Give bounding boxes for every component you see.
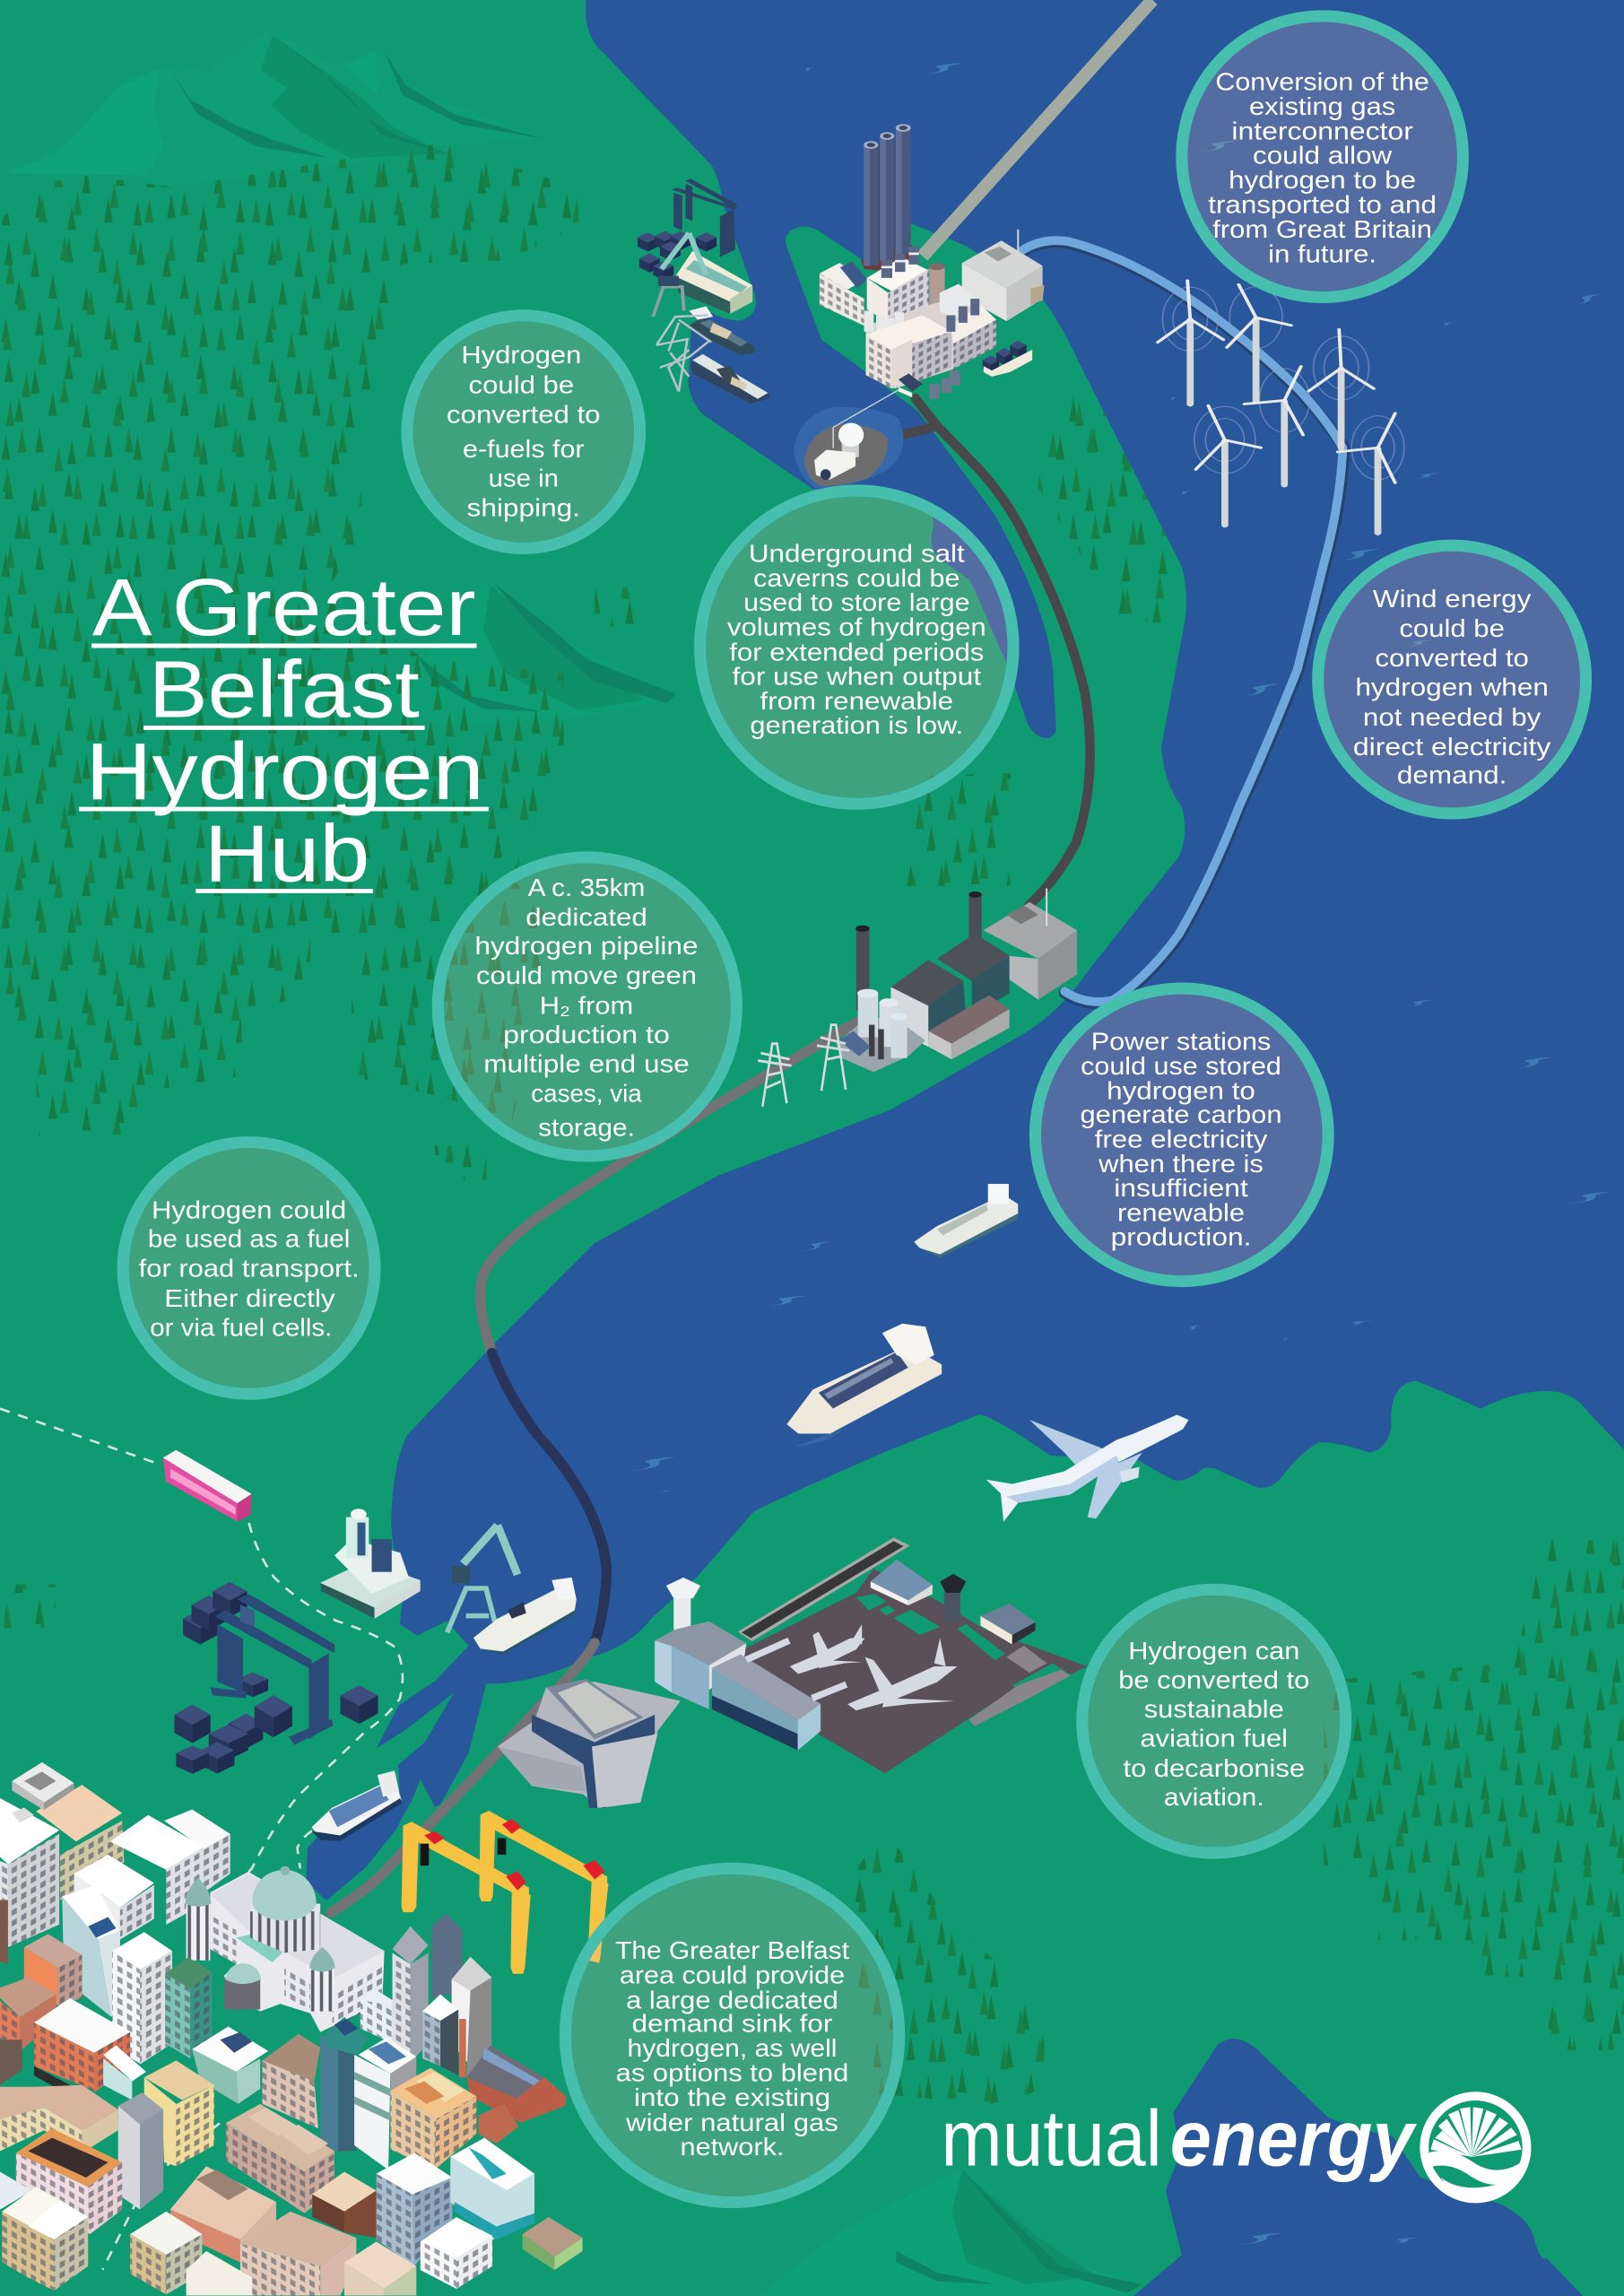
capitol: Belfast City Hall [186, 1866, 385, 2032]
icon: container ship in estuary [312, 1770, 402, 1841]
callout text: into the existing [634, 2083, 830, 2111]
pipeline: north section [867, 398, 1090, 905]
callout text: area could provide [620, 1961, 845, 1989]
pipeline: south section [331, 1643, 595, 1912]
callout text: generation is low. [750, 711, 963, 739]
callout text: insufficient [1114, 1174, 1248, 1202]
icon: road bus [163, 1450, 252, 1521]
callout text: Hydrogen could [152, 1196, 346, 1223]
callout text: could be [469, 371, 574, 399]
callout text: transported to and [1208, 191, 1437, 219]
callout: road transport [123, 1142, 375, 1394]
callout: dedicated pipeline [438, 857, 736, 1156]
tall tank [929, 263, 945, 307]
callout text [475, 874, 699, 1142]
callout ring [700, 491, 1013, 804]
icon: hydrogen production complex [794, 124, 1045, 489]
callout text: Either directly [164, 1284, 335, 1312]
callout text: shipping. [467, 493, 580, 521]
callout text: direct electricity [1353, 733, 1550, 761]
logo: mutual energy [941, 2094, 1527, 2201]
grass cut-outs [856, 1594, 1005, 1660]
icon: Harland and Wolff cranes [402, 1811, 608, 1974]
callout text: generate carbon [1081, 1100, 1282, 1128]
skyscrapers [360, 1913, 491, 2077]
callout ring [1182, 16, 1463, 297]
callout text: as options to blend [616, 2059, 848, 2087]
callout text: The Greater Belfast [615, 1936, 849, 1964]
control tower [940, 1574, 966, 1622]
title line 4: Hub [204, 810, 369, 900]
apron [741, 1569, 1088, 1773]
gantry crane [672, 178, 738, 257]
callout text: multiple end use [483, 1050, 690, 1078]
tanker ship 2 [690, 354, 769, 404]
containers [638, 231, 716, 280]
service area [968, 1670, 1070, 1726]
callout text: renewable [1117, 1198, 1245, 1226]
callout text: sustainable [1144, 1695, 1284, 1723]
turbine towers [1190, 319, 1378, 533]
callout text: network. [681, 2133, 784, 2161]
callout text: could move green [476, 961, 697, 989]
orange block [390, 2068, 476, 2170]
small units [899, 341, 1032, 399]
gantry crane [211, 1594, 334, 1744]
silos [864, 284, 977, 339]
grey building [984, 888, 1077, 1000]
logo emblem [1424, 2096, 1527, 2201]
title underlines [79, 644, 489, 893]
icon: Titanic Belfast building [498, 1679, 681, 1808]
turbine noise arcs [1162, 287, 1404, 480]
callout text: dedicated [525, 903, 647, 931]
callout text: H₂ from [540, 991, 633, 1019]
callout ring [123, 1142, 375, 1394]
church [466, 2046, 567, 2144]
callout ring [407, 316, 640, 548]
callout text: hydrogen to be [1229, 166, 1416, 194]
process plant base [836, 1015, 925, 1072]
title line 2: Belfast [149, 645, 420, 735]
filler between blocks [866, 296, 996, 388]
main hall [655, 1622, 746, 1709]
callout text: to decarbonise [1124, 1754, 1305, 1782]
callout text: when there is [1098, 1150, 1264, 1178]
water ripples [620, 63, 1611, 2245]
mid buildings [0, 1932, 320, 2128]
tanker ship 1 [689, 307, 755, 355]
icon: power station [758, 888, 1077, 1107]
turbine blades [1158, 281, 1395, 483]
callout text: used to store large [743, 588, 970, 616]
callout ring [1082, 1589, 1346, 1853]
low building [928, 996, 1010, 1059]
callout text: Power stations [1091, 1028, 1271, 1056]
crane details [424, 1819, 605, 1891]
callout text: aviation. [1164, 1783, 1264, 1811]
title line 1: A Greater [92, 563, 476, 653]
glass wing [712, 1655, 821, 1751]
callout text: from renewable [760, 687, 953, 715]
balcony block [354, 2038, 416, 2170]
callout text: hydrogen, as well [627, 2034, 838, 2062]
callout text: storage. [538, 1114, 635, 1142]
hangar [871, 1560, 933, 1605]
grey block [962, 230, 1045, 321]
callout text: converted to [1375, 644, 1529, 672]
cylinder tower [320, 2017, 369, 2151]
hydrogen storage cavern [794, 390, 903, 489]
callout: gas interconnector conversion [1182, 16, 1463, 297]
dashed road [0, 1409, 403, 2270]
callout text: hydrogen to [1107, 1076, 1255, 1104]
chimneys [861, 124, 913, 271]
tanks [838, 989, 907, 1059]
callout: wind energy conversion [1318, 545, 1586, 813]
central block [867, 247, 929, 324]
callout text: existing gas [1249, 92, 1395, 120]
callout text: caverns could be [753, 564, 960, 592]
lower terrace [0, 2060, 334, 2234]
dock building [675, 251, 752, 314]
icon: container ship [786, 1324, 942, 1447]
callout text: hydrogen pipeline [475, 932, 699, 960]
callout text: could be [1399, 614, 1505, 642]
callout text [139, 1196, 360, 1342]
turbine halls [890, 934, 1010, 1047]
callout ring [1036, 988, 1328, 1282]
callout: salt cavern storage [700, 491, 1013, 804]
callout text: e-fuels for [463, 435, 585, 463]
container stacks [174, 1582, 378, 1774]
icon: harbour office [320, 1509, 421, 1619]
callout text [615, 1936, 849, 2161]
parked aircraft [790, 1624, 958, 1710]
callout text: not needed by [1363, 703, 1541, 731]
callout text: in future. [1268, 239, 1376, 267]
rear crane [479, 1811, 608, 1962]
water: bottom right bay [1133, 2039, 1583, 2296]
title line 3: Hydrogen [86, 727, 484, 817]
crane [653, 233, 707, 317]
mountain: bottom [761, 2170, 1142, 2296]
cable from wind farm [1022, 240, 1344, 1004]
callout text: from Great Britain [1212, 215, 1432, 243]
callout text: be used as a fuel [148, 1225, 350, 1253]
second hangar [980, 1604, 1036, 1644]
icon: tanker ship [914, 1184, 1018, 1257]
icon: quay crane [447, 1526, 517, 1632]
callout text [1353, 585, 1550, 788]
icon: city of Belfast [0, 1762, 583, 2296]
callout text [447, 341, 601, 521]
icon: airport terminal [655, 1578, 847, 1751]
icon: airport [738, 1537, 1088, 1773]
pylons [758, 1025, 849, 1107]
mountain: top left range [4, 32, 544, 187]
logo wordmark: energy [1170, 2094, 1417, 2183]
callout text: wider natural gas [625, 2109, 838, 2136]
callout text: be converted to [1118, 1665, 1309, 1693]
icon: estuary cargo ship [473, 1578, 577, 1655]
callout text: hydrogen when [1355, 674, 1549, 701]
callout text: Hydrogen can [1128, 1637, 1299, 1665]
callout: Greater Belfast demand sink [565, 1868, 899, 2203]
callout text: A c. 35km [528, 874, 645, 901]
callout ring [1318, 545, 1586, 813]
callout text: Hydrogen [461, 341, 581, 369]
runway [738, 1537, 910, 1641]
left block [820, 262, 867, 326]
mountain: middle [384, 583, 676, 725]
callout text: could use stored [1081, 1052, 1281, 1080]
logo wordmark [941, 2094, 1417, 2183]
pipeline: middle section [481, 1022, 856, 1353]
callout text: or via fuel cells. [150, 1314, 332, 1342]
callout text [727, 540, 986, 739]
callout text: production. [1111, 1223, 1251, 1251]
callout text: Underground salt [749, 540, 965, 568]
callout: sustainable aviation fuel [1082, 1589, 1346, 1853]
helipads [1006, 1646, 1046, 1673]
jet bridges [746, 1640, 847, 1698]
pipeline: under water [492, 1353, 606, 1643]
callout text: interconnector [1231, 117, 1413, 144]
callout text: cases, via [531, 1079, 642, 1107]
lattice cranes [656, 316, 711, 391]
logo wordmark: mutual [941, 2094, 1162, 2183]
callout text: for road transport. [139, 1254, 360, 1282]
callout text: Conversion of the [1215, 67, 1429, 95]
callout text [1081, 1028, 1282, 1251]
callout text: for use when output [733, 662, 981, 690]
callout ring [565, 1868, 899, 2203]
chimneys [855, 891, 982, 1010]
hydrogen pipeline [331, 398, 1090, 1912]
callout text: volumes of hydrogen [727, 613, 986, 641]
front crane [402, 1822, 531, 1974]
water: sea and estuary [306, 0, 1624, 1900]
icon: container terminal [174, 1582, 378, 1774]
callout ring [438, 857, 736, 1156]
callout text: converted to [447, 400, 601, 428]
callout text: Wind energy [1373, 585, 1531, 613]
icon: aeroplane [986, 1414, 1188, 1522]
icon: offshore wind farm [1158, 281, 1404, 533]
callout text: free electricity [1095, 1125, 1267, 1152]
front buildings [2, 2138, 583, 2296]
callout: e-fuels for shipping [407, 316, 640, 548]
icon: top port and ships [638, 178, 769, 404]
callout text: aviation fuel [1141, 1725, 1288, 1752]
callout text: for extended periods [729, 638, 984, 665]
right low block [946, 299, 996, 369]
callout text: demand sink for [632, 2010, 832, 2038]
callout text: could allow [1253, 142, 1393, 170]
callout text: demand. [1397, 761, 1507, 788]
callout text: production to [503, 1021, 670, 1048]
lower block [866, 316, 951, 388]
callout text: a large dedicated [626, 1986, 838, 2013]
tower [666, 1578, 700, 1638]
callout text [1208, 67, 1437, 267]
rear buildings [0, 1762, 230, 2017]
callout text: use in [489, 465, 559, 492]
subsea interconnector [923, 0, 1152, 257]
callout: power stations [1036, 988, 1328, 1282]
callout text [1118, 1637, 1309, 1811]
title [79, 563, 489, 900]
